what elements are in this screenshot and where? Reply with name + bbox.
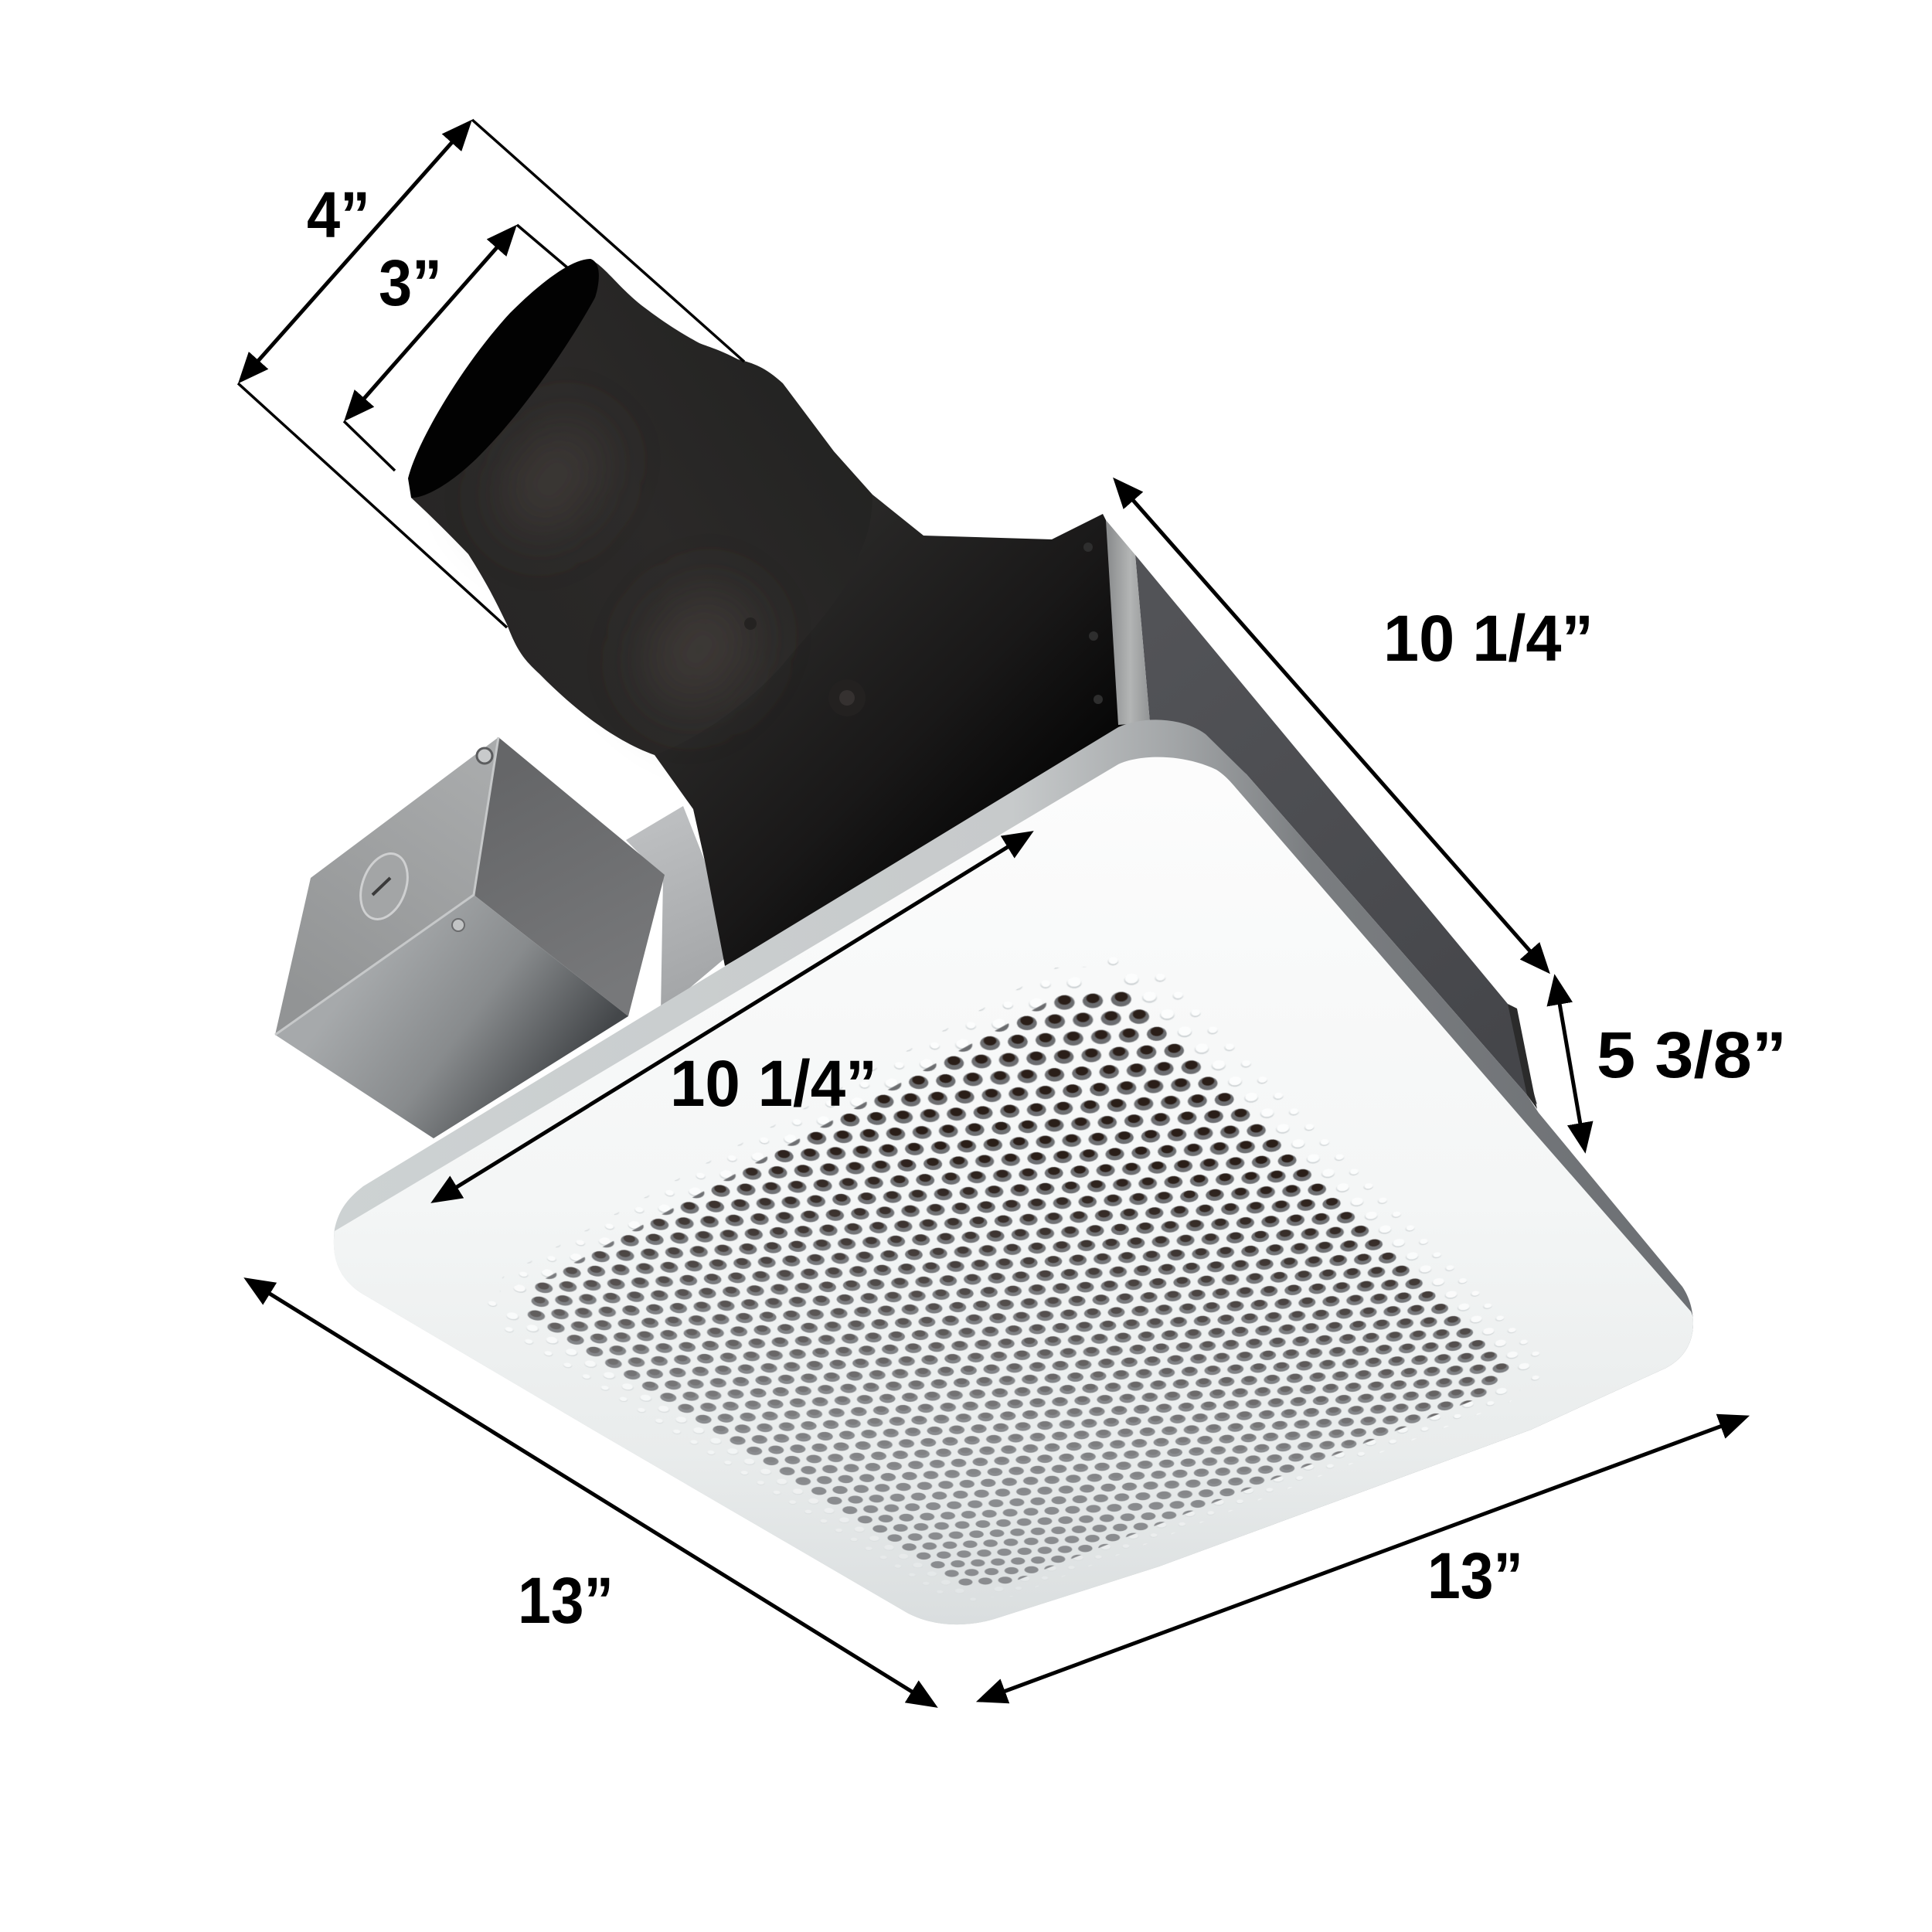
grille plate face — [334, 757, 1693, 1624]
lower duct and black housing interior — [655, 495, 1128, 966]
arrow: 10 1/4 inch right — [1121, 486, 1543, 965]
label: 10 1/4 inch right: 10 1/4” — [1383, 602, 1594, 675]
extension lines for 3 inch duct dimension — [344, 225, 568, 471]
flange screws — [1083, 543, 1103, 704]
junction box — [275, 737, 665, 1138]
label: 13 inch right: 13” — [1427, 1539, 1523, 1612]
upper duct body — [411, 259, 872, 755]
extension lines for 4 inch duct dimension — [238, 120, 744, 628]
duct rivets — [744, 617, 866, 716]
back metal panel — [626, 806, 725, 1012]
arrow: 5 3/8 inch — [1556, 985, 1583, 1142]
housing end strip — [1508, 1004, 1537, 1109]
arrow: 10 1/4 inch on plate — [440, 837, 1024, 1197]
arrow: 4 inch — [246, 128, 464, 375]
arrow: 13 inch right — [987, 1420, 1739, 1698]
housing side panel — [1135, 555, 1537, 1104]
grille plate bevel edge — [334, 719, 1693, 1624]
duct mouth opening — [408, 259, 599, 498]
housing flange strip — [1106, 520, 1150, 725]
perforated grille in perspective — [488, 960, 1539, 1586]
label: 4 inch: 4” — [307, 179, 370, 251]
label: 3 inch: 3” — [379, 247, 442, 319]
arrow: 13 inch left — [253, 1284, 928, 1702]
label: 5 3/8 inch: 5 3/8” — [1597, 1019, 1787, 1091]
label: 10 1/4 inch on plate: 10 1/4” — [670, 1047, 877, 1120]
label: 13 inch left: 13” — [518, 1564, 614, 1637]
arrow: 3 inch — [352, 233, 509, 413]
